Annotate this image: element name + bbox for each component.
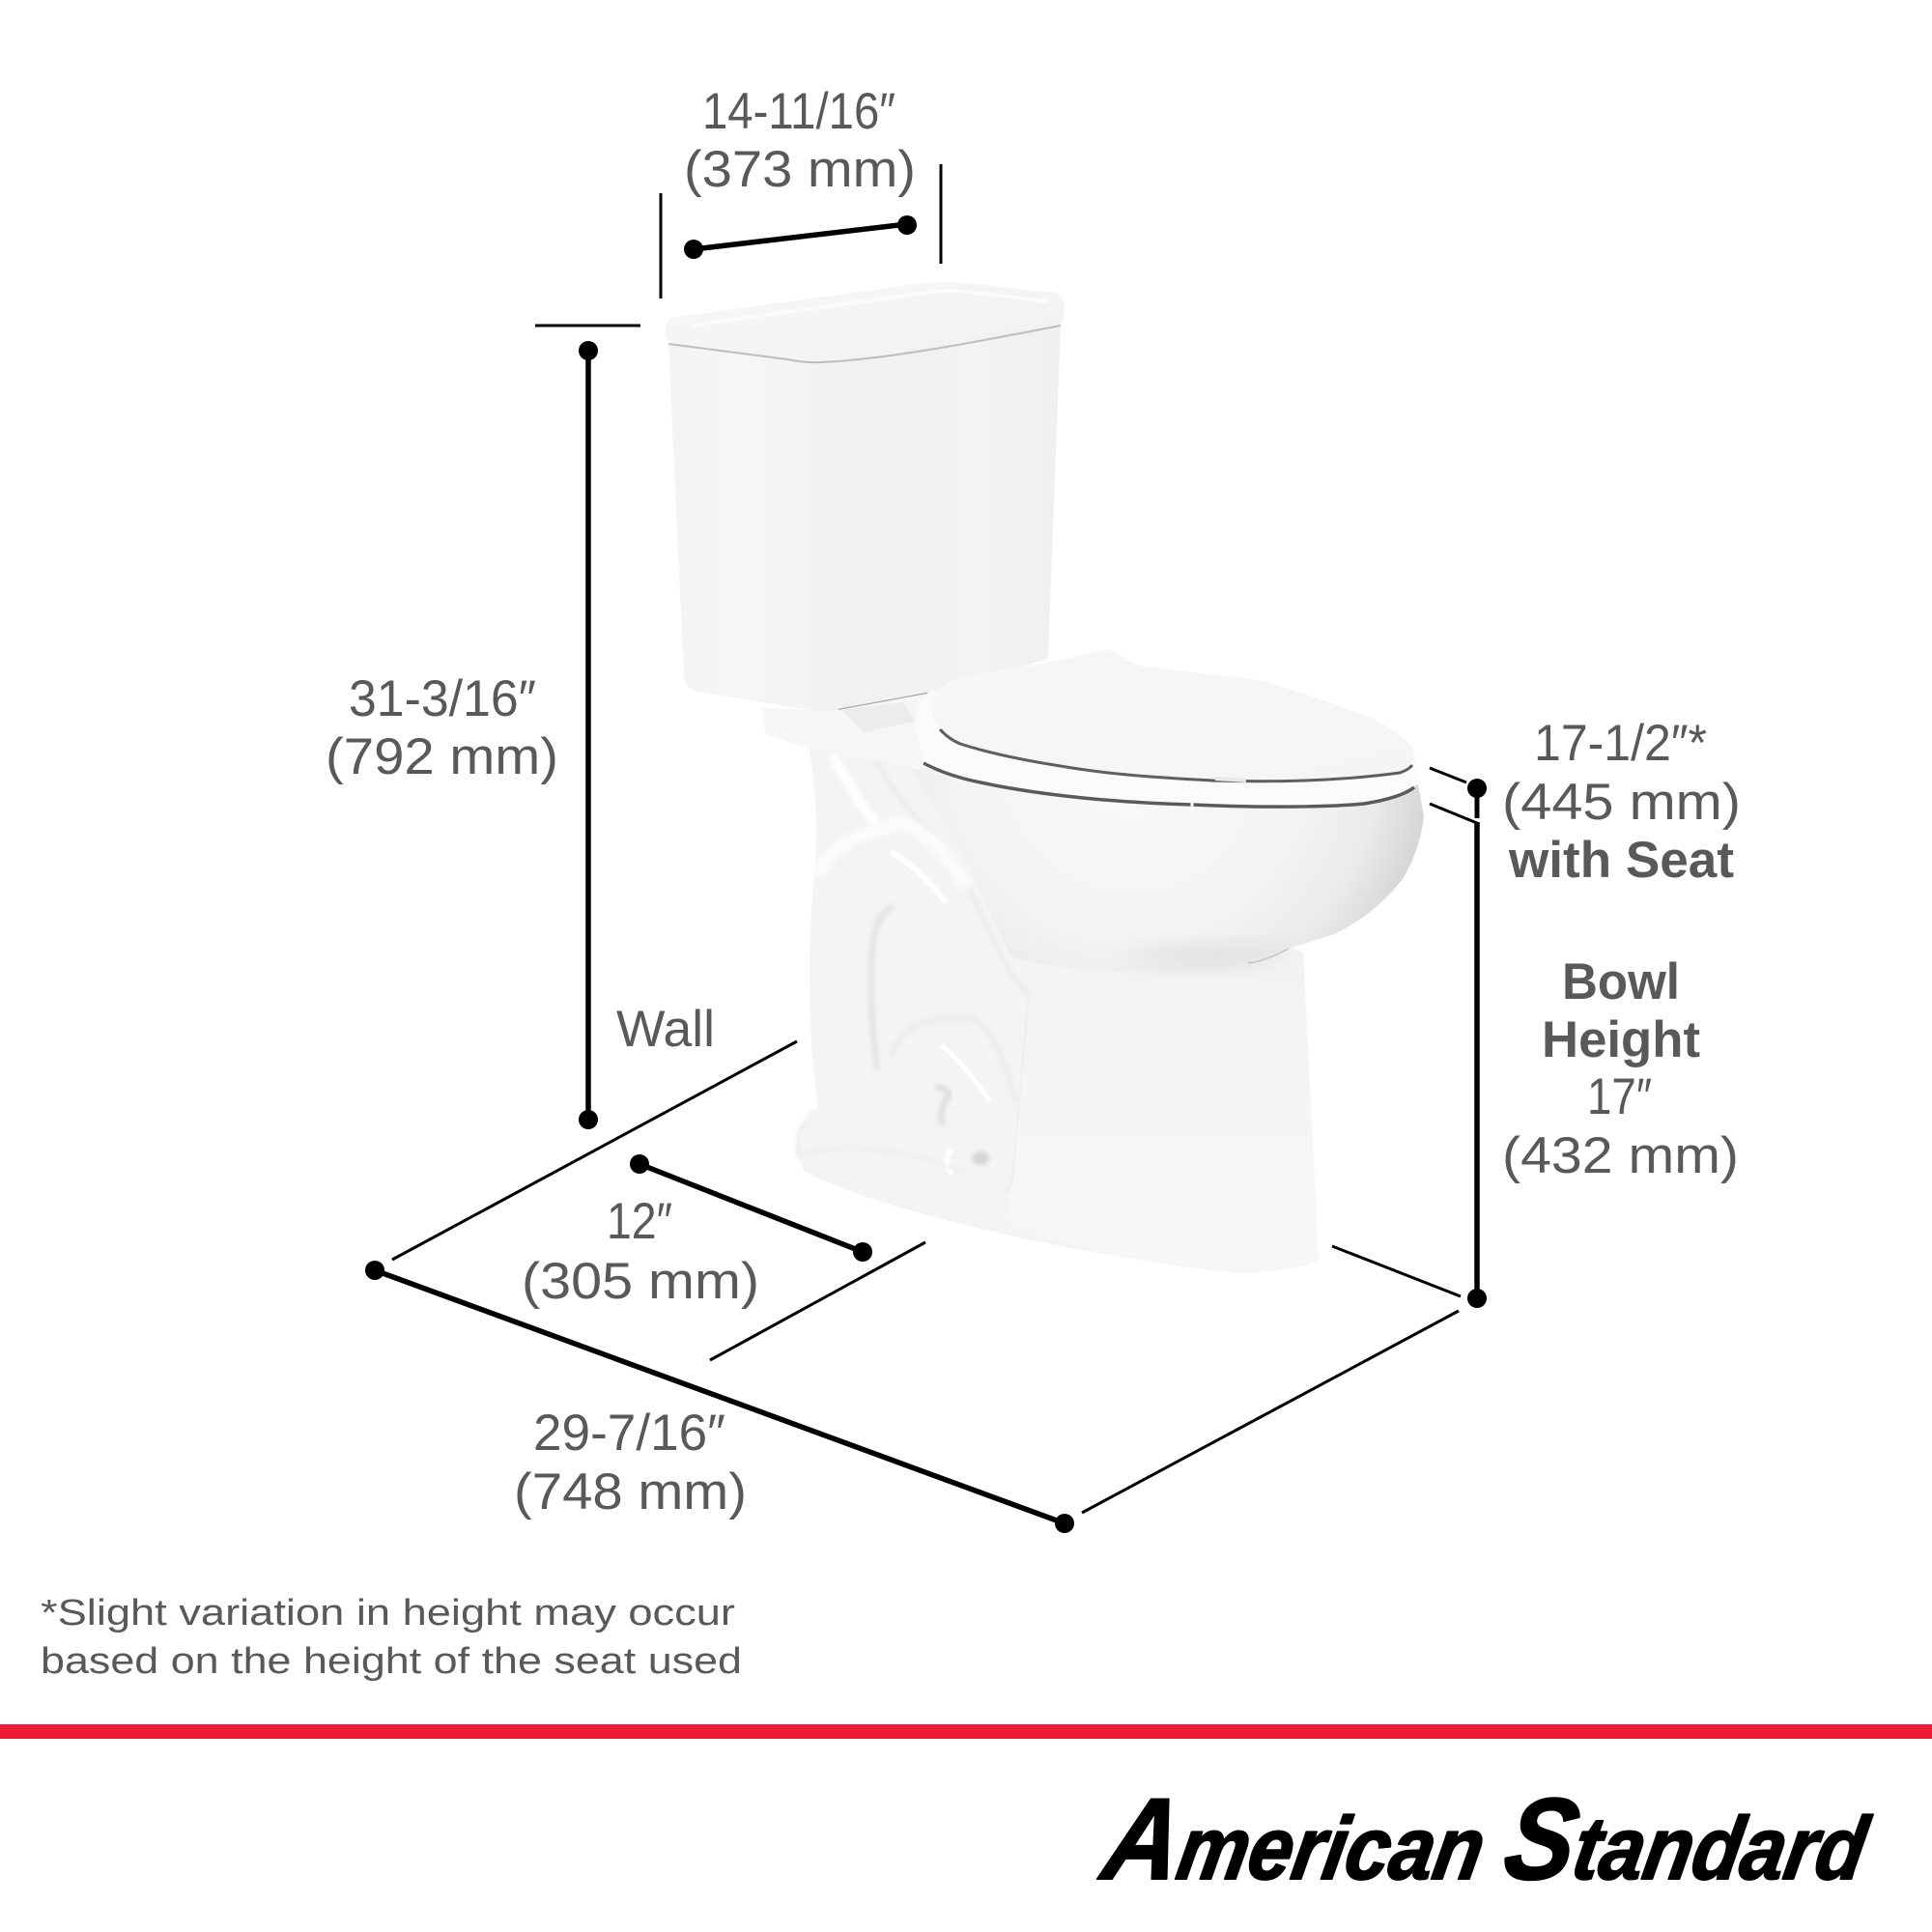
footnote: *Slight variation in height may occur [41, 1593, 735, 1634]
seat ring [916, 691, 1419, 810]
brand logo: American Standard [1093, 1775, 1881, 1904]
wall label: Wall [616, 1001, 715, 1058]
dimension: overall height 31-3/16 in [326, 326, 640, 1129]
dimension: rough-in 12 in: 12″ [607, 1193, 672, 1250]
toilet illustration [666, 282, 1424, 1272]
footnote: based on the height of the seat used [41, 1641, 742, 1682]
toilet pedestal and trapway [765, 734, 1319, 1272]
seat lid [931, 649, 1414, 781]
dimension: bowl height 17 in: 17″ [1587, 1068, 1652, 1125]
footnote [41, 1593, 742, 1682]
dimension: rough-in 12 in: (305 mm) [522, 1253, 759, 1310]
tank body [668, 326, 1061, 710]
bowl [908, 763, 1424, 973]
dimension: height with seat 17-1/2 in: 17-1/2″* [1534, 715, 1707, 772]
dimension: tank width 14-11/16 in [661, 83, 941, 298]
dimension: height with seat 17-1/2 in: with Seat [1508, 832, 1734, 889]
tank lid [666, 282, 1065, 362]
dimension: depth 29-7/16 in: 29-7/16″ [533, 1405, 725, 1462]
dimension: overall height 31-3/16 in: 31-3/16″ [349, 670, 536, 727]
dimension: depth 29-7/16 in [365, 1261, 1459, 1533]
dimension: height with seat 17-1/2 in: (445 mm) [1502, 774, 1741, 831]
dimension: rough-in 12 in [522, 1154, 925, 1360]
dimension: bowl height 17 in: (432 mm) [1502, 1127, 1739, 1184]
dimension: bowl height 17 in [1332, 804, 1739, 1308]
red divider bar [0, 1724, 1932, 1739]
dimension: overall height 31-3/16 in: (792 mm) [326, 728, 558, 785]
dimension: bowl height 17 in: Height [1542, 1011, 1700, 1068]
dimension: tank width 14-11/16 in: (373 mm) [684, 141, 916, 198]
dimension: tank width 14-11/16 in: 14-11/16″ [702, 83, 895, 140]
dimension: bowl height 17 in: Bowl [1562, 953, 1680, 1010]
dimension: depth 29-7/16 in: (748 mm) [514, 1463, 747, 1520]
dimension: height with seat 17-1/2 in [1430, 715, 1741, 889]
wall label [392, 1001, 797, 1260]
neck connecting tank to bowl [763, 694, 927, 770]
